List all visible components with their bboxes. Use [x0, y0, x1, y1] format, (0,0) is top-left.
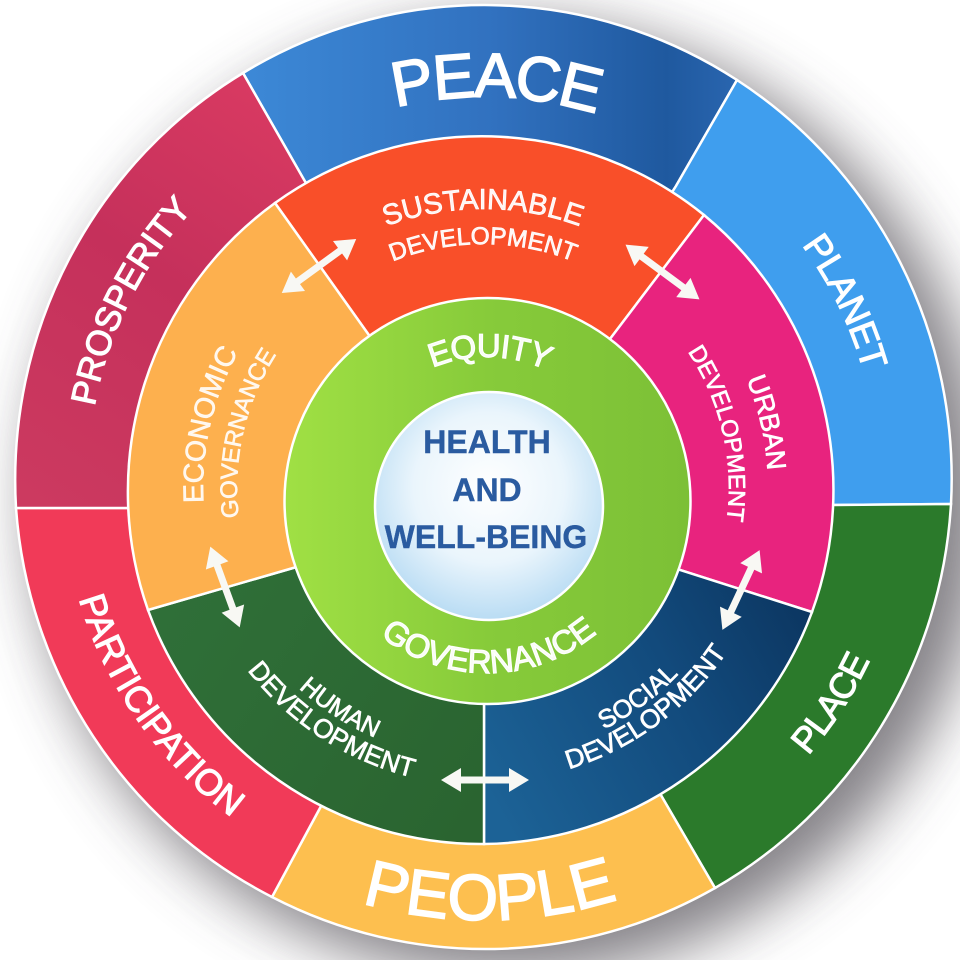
label: economic governance	[183, 346, 276, 518]
label: economic governance: GOVERNANCE	[220, 346, 276, 518]
arrow: sustainable to urban	[618, 235, 707, 309]
segment: participation	[16, 490, 484, 897]
label: social development: SOCIAL	[598, 668, 678, 728]
label: economic governance: ECONOMIC	[183, 346, 236, 502]
core title	[385, 424, 587, 555]
label: peace: PEACE	[392, 52, 604, 114]
label: prosperity: PROSPERITY	[70, 193, 187, 404]
segment: urban development	[487, 215, 833, 612]
core title: AND	[452, 472, 522, 508]
label: planet: PLANET	[803, 232, 888, 364]
arrow: urban to social	[712, 545, 770, 635]
segment: peace	[243, 5, 737, 490]
arrow: social to human	[441, 768, 529, 792]
label: place: PLACE	[790, 650, 870, 754]
segment: planet	[484, 80, 952, 505]
segment: prosperity	[15, 73, 484, 508]
middle ring	[128, 136, 833, 844]
segment: place	[484, 490, 951, 888]
segment: sustainable development	[275, 136, 704, 500]
label: people: PEOPLE	[366, 856, 616, 922]
arrow: economic to sustainable	[275, 229, 363, 303]
core title: WELL-BEING	[385, 519, 587, 555]
label: sustainable development: DEVELOPMENT	[388, 226, 580, 262]
label: human development: DEVELOPMENT	[248, 660, 417, 776]
core circle	[375, 392, 603, 620]
segment: human development	[148, 500, 487, 844]
label: human development: HUMAN	[300, 676, 381, 738]
arrow: human to economic	[199, 542, 251, 632]
segment: economic governance	[128, 203, 487, 610]
segment: social development	[484, 500, 812, 844]
label: equity: EQUITY	[427, 334, 556, 368]
label: sustainable development: SUSTAINABLE	[382, 188, 585, 226]
label: governance: GOVERNANCE	[384, 616, 597, 674]
label: social development: DEVELOPMENT	[564, 642, 724, 770]
segment: people	[272, 490, 715, 949]
label: urban development: URBAN	[748, 374, 786, 469]
core title: HEALTH	[423, 424, 551, 460]
label: participation: PARTICIPATION	[79, 593, 246, 816]
label: sustainable development	[382, 188, 585, 262]
green ring	[284, 298, 690, 704]
label: urban development: DEVELOPMENT	[688, 344, 746, 522]
arrows	[199, 229, 770, 792]
middle ring labels	[183, 188, 786, 776]
label: urban development	[688, 344, 786, 522]
